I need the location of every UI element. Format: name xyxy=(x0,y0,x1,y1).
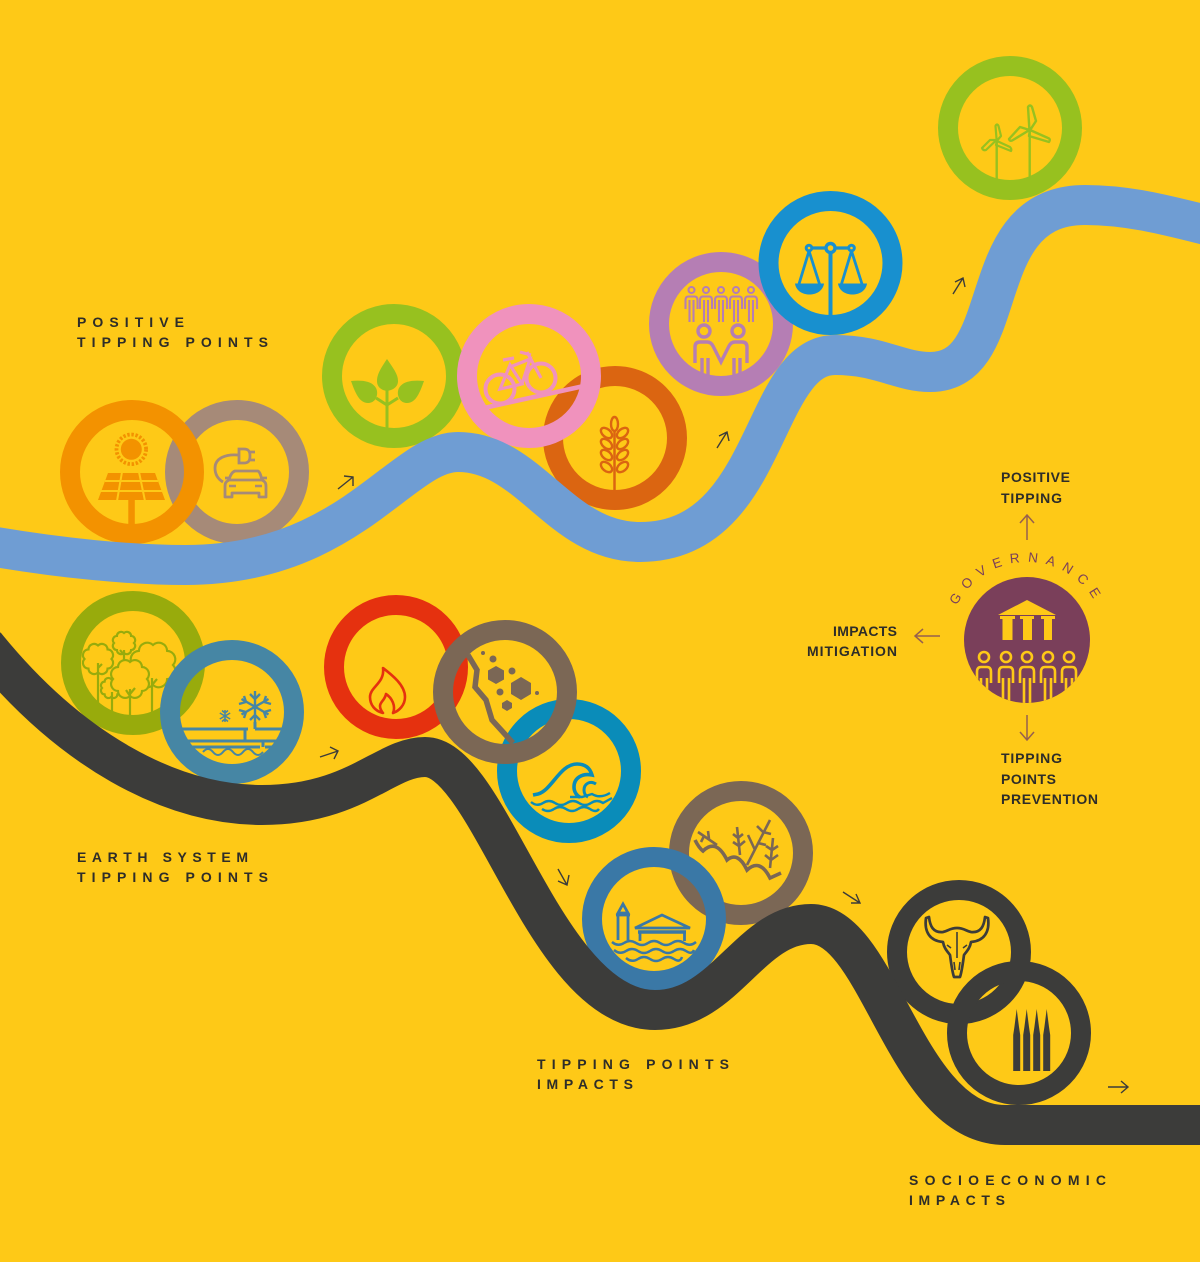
badge: landslide xyxy=(443,630,567,754)
label: positive tipping: POSITIVE xyxy=(1001,469,1070,485)
badge: ocean wave xyxy=(507,709,631,833)
badge: animal skull xyxy=(897,890,1021,1014)
badge: forest xyxy=(71,601,195,725)
heading: positive tipping points xyxy=(77,314,268,350)
badge: dry land xyxy=(679,791,803,915)
arrow: governance to tipping points prevention xyxy=(1020,715,1034,740)
heading: positive tipping points: TIPPING POINTS xyxy=(77,334,268,350)
arrow: down-right along impacts path xyxy=(843,892,860,903)
arrow: right along earth system path xyxy=(320,747,338,759)
label: positive tipping xyxy=(1001,469,1070,506)
heading: tipping points impacts: TIPPING POINTS xyxy=(537,1056,729,1072)
heading: socioeconomic impacts xyxy=(909,1172,1106,1208)
arrow: second up-right along positive path xyxy=(717,432,729,448)
badge: wind turbines xyxy=(948,66,1072,190)
arrow: third up-right along positive path xyxy=(953,278,965,294)
badge: wheat xyxy=(553,376,677,500)
label: positive tipping: TIPPING xyxy=(1001,490,1062,506)
badge: ammunition xyxy=(957,971,1081,1095)
heading: earth system tipping points xyxy=(77,849,268,885)
arrow: governance to impacts mitigation xyxy=(915,629,940,643)
label: tipping points prevention: PREVENTION xyxy=(1001,791,1098,807)
arrow: up-right along positive path xyxy=(338,476,353,489)
arrow: right along socioeconomic path xyxy=(1108,1081,1128,1093)
dark river: earth system path xyxy=(0,645,1200,1125)
label: tipping points prevention: POINTS xyxy=(1001,771,1056,787)
blue river: positive tipping path xyxy=(0,205,1200,565)
governance: seal with temple and people xyxy=(964,577,1090,705)
badge: bicycle on a slope xyxy=(467,314,591,438)
badge: justice scales xyxy=(768,201,892,325)
label: impacts mitigation xyxy=(807,623,897,659)
arrow: governance to positive tipping xyxy=(1020,515,1034,540)
heading: tipping points impacts: IMPACTS xyxy=(537,1076,633,1092)
badge: electric car xyxy=(175,410,299,534)
icon: temple xyxy=(998,600,1056,640)
label: impacts mitigation: MITIGATION xyxy=(807,643,897,659)
heading: positive tipping points: POSITIVE xyxy=(77,314,184,330)
badge: people xyxy=(659,262,783,386)
heading: socioeconomic impacts: SOCIOECONOMIC xyxy=(909,1172,1106,1188)
heading: tipping points impacts xyxy=(537,1056,729,1092)
arrow: down along impacts path xyxy=(558,869,569,885)
heading: earth system tipping points: EARTH SYSTEM xyxy=(77,849,248,865)
badge: fire xyxy=(334,605,458,729)
badge: plant xyxy=(332,314,456,438)
label: tipping points prevention: TIPPING xyxy=(1001,750,1062,766)
badge: solar panel xyxy=(70,410,194,534)
governance: curved label: GOVERNANCE xyxy=(950,552,1101,604)
heading: socioeconomic impacts: IMPACTS xyxy=(909,1192,1005,1208)
badge: melting ice xyxy=(170,650,294,774)
badge: flooded buildings xyxy=(592,857,716,981)
icon: five citizens xyxy=(977,652,1076,705)
label: tipping points prevention xyxy=(1001,750,1098,807)
label: impacts mitigation: IMPACTS xyxy=(833,623,897,639)
heading: earth system tipping points: TIPPING POINTS xyxy=(77,869,268,885)
